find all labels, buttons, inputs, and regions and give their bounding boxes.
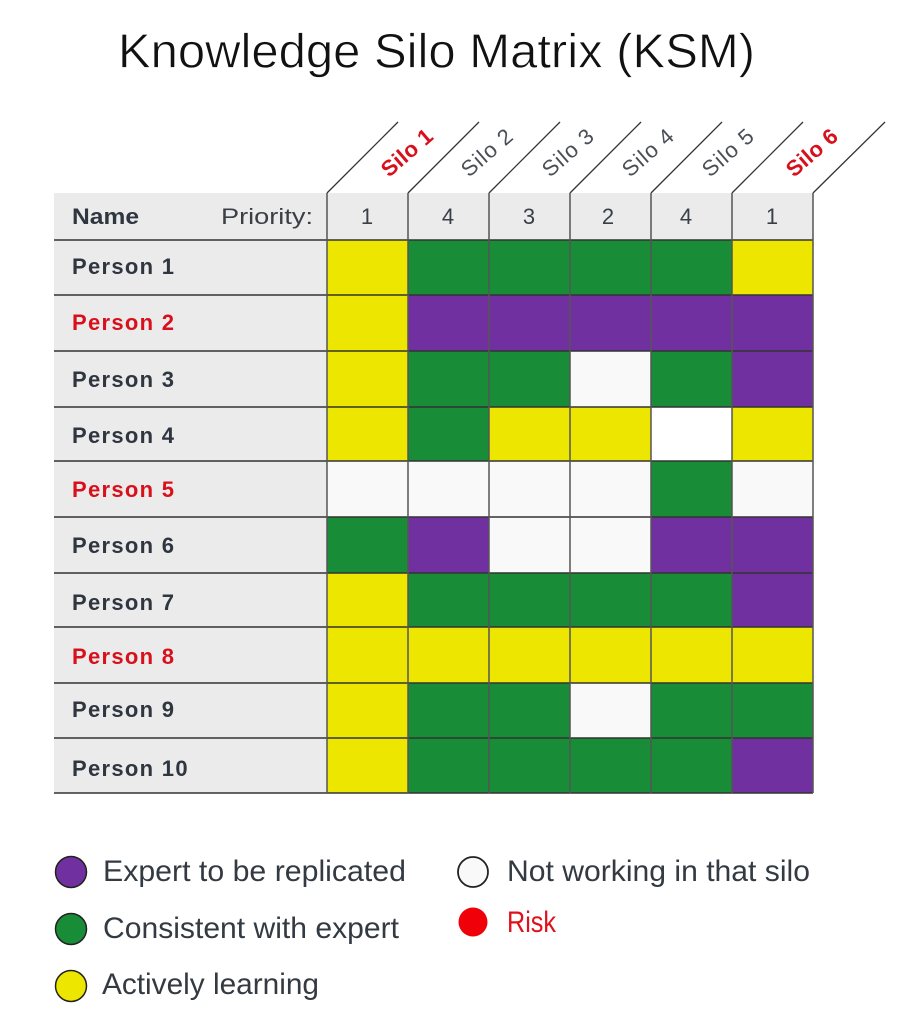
silo headers: slanted column labels: Silo 2	[456, 123, 518, 182]
matrix cells	[327, 240, 813, 793]
row labels: people: Person 2	[72, 310, 175, 335]
row 2	[327, 295, 813, 351]
header row: name and priority values: 1	[766, 204, 778, 229]
row labels: people: Person 7	[72, 590, 175, 615]
row 8	[327, 627, 813, 683]
legend item: expert to be replicated: Expert to be replicated	[103, 855, 406, 888]
silo headers: slanted column labels: Silo 3	[537, 123, 599, 182]
legend item: risk	[458, 906, 557, 939]
row labels: people: Person 6	[72, 533, 175, 558]
legend item: not working in that silo: Not working in that silo	[507, 855, 810, 888]
row 4	[327, 407, 813, 461]
row 10	[327, 738, 813, 793]
header row: name and priority values: 1	[361, 204, 373, 229]
row 6	[327, 517, 813, 573]
row labels: people: Person 10	[72, 756, 189, 781]
row 7	[327, 573, 813, 627]
row 1	[327, 240, 813, 295]
silo headers: slanted column labels: Silo 5	[697, 123, 759, 182]
silo headers: slanted column labels	[327, 122, 885, 193]
row labels: people	[72, 254, 189, 781]
title: Knowledge Silo Matrix (KSM)	[118, 26, 755, 78]
row labels: people: Person 8	[72, 644, 175, 669]
header row: name and priority values: 4	[442, 204, 454, 229]
header row: name and priority values: 4	[680, 204, 692, 229]
header row: name and priority values: Name	[72, 204, 139, 229]
legend item: actively learning: Actively learning	[102, 968, 319, 1001]
header row: name and priority values: Priority:	[221, 204, 313, 229]
legend item: consistent with expert: Consistent with expert	[103, 912, 400, 945]
header row: name and priority values	[72, 204, 778, 229]
row 9	[327, 683, 813, 738]
row 3	[327, 351, 813, 407]
header row: name and priority values: 2	[602, 204, 614, 229]
legend item: risk: Risk	[507, 906, 557, 939]
name column and header background	[54, 193, 813, 793]
row labels: people: Person 9	[72, 697, 175, 722]
silo headers: slanted column labels: Silo 1	[376, 123, 438, 182]
header row: name and priority values: 3	[523, 204, 535, 229]
silo headers: slanted column labels: Silo 4	[617, 123, 679, 182]
row labels: people: Person 3	[72, 367, 175, 392]
row labels: people: Person 4	[72, 423, 175, 448]
row labels: people: Person 1	[72, 254, 175, 279]
row labels: people: Person 5	[72, 477, 175, 502]
row 5	[327, 461, 813, 517]
silo headers: slanted column labels: Silo 6	[781, 123, 843, 182]
legend	[56, 855, 810, 1002]
matrix table	[54, 193, 813, 793]
